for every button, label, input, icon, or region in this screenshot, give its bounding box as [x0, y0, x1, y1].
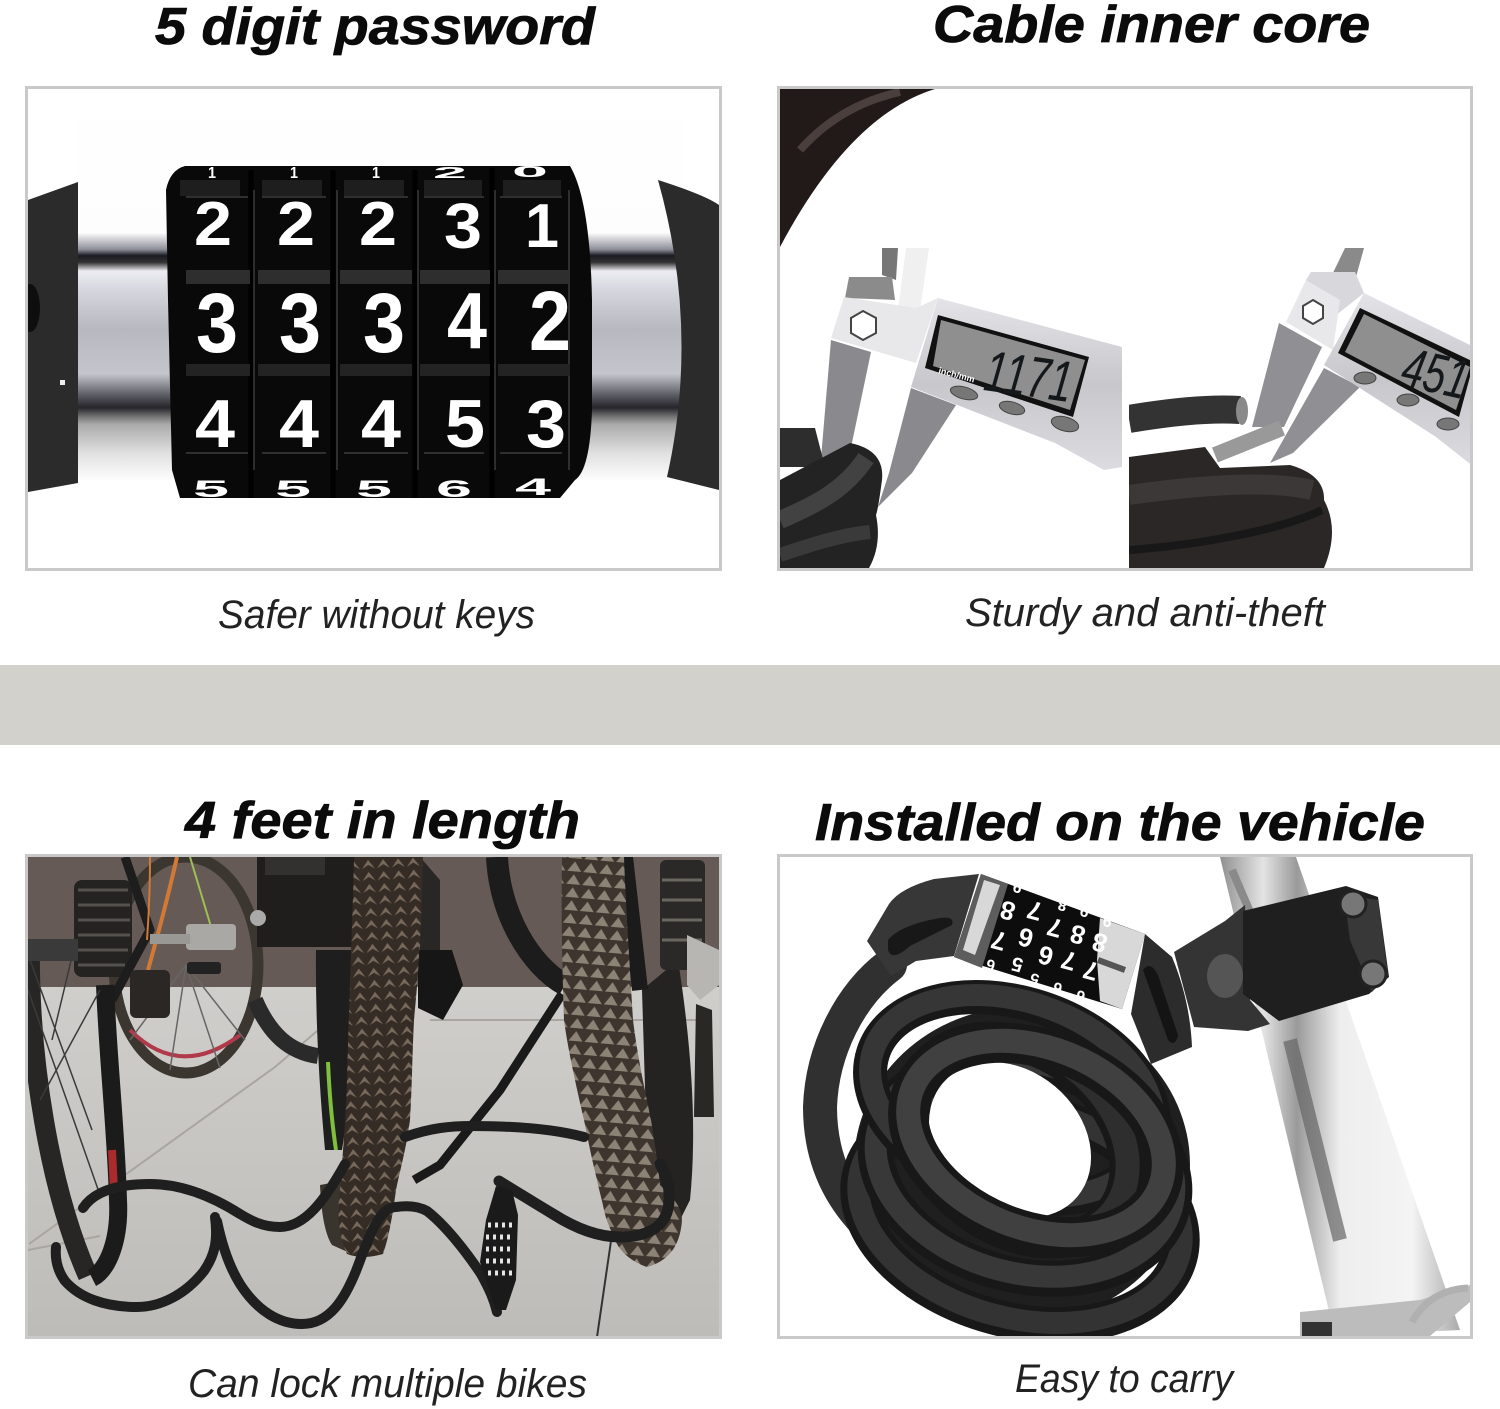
dial stack: 5	[193, 476, 229, 503]
left coil	[780, 428, 882, 568]
lock dials: 7	[1058, 944, 1080, 977]
dial stack: 4	[515, 474, 553, 501]
shackle strand	[820, 965, 890, 1232]
lock dials: 8	[1056, 895, 1069, 914]
lock dials: 7	[1080, 954, 1102, 987]
dial stack: 1	[372, 165, 380, 182]
left black grip	[28, 182, 78, 492]
dial stack: 3	[526, 386, 566, 462]
wall background	[28, 857, 719, 990]
lock dials: 8	[997, 894, 1019, 927]
title: Installed on the vehicle: Installed on the vehicle	[815, 794, 1425, 852]
panel: caliper cable measurements	[778, 88, 1475, 570]
dial stack: 1	[290, 165, 298, 182]
dial stack: 0	[512, 164, 548, 181]
dial stack: 3	[444, 190, 482, 262]
caption: Can lock multiple bikes: Can lock multiple bikes	[188, 1362, 587, 1406]
dial stack: 2	[277, 190, 315, 259]
upper coil	[853, 980, 1163, 1207]
lock dials: 9	[1101, 911, 1114, 930]
coils	[820, 961, 1207, 1359]
lock body right	[1131, 934, 1192, 1064]
caption: Sturdy and anti-theft: Sturdy and anti-theft	[965, 591, 1327, 635]
lock dials: 5	[1028, 969, 1041, 988]
dial stack: 1	[525, 192, 559, 261]
mount bracket	[1174, 886, 1389, 1031]
caption: Safer without keys: Safer without keys	[218, 593, 535, 637]
dark cable arc top left	[780, 89, 935, 247]
dial stack: 2	[359, 190, 397, 259]
lock dials: 8	[1067, 918, 1089, 951]
hole through coil	[929, 1062, 1092, 1216]
lock dials: 8	[1089, 926, 1111, 959]
dial stack: 1	[208, 165, 216, 182]
bike drivetrain and frame	[74, 857, 463, 1150]
dial stack: 3	[279, 276, 321, 370]
lock body left	[867, 874, 979, 976]
dial stack: 4	[361, 386, 401, 462]
lock dials: 9	[1078, 901, 1091, 920]
lock dials: 6	[1015, 921, 1037, 954]
inner coil	[928, 1066, 1144, 1216]
dial stack: 3	[196, 276, 238, 370]
caption: Easy to carry: Easy to carry	[1015, 1357, 1236, 1401]
lock dials: 6	[1074, 986, 1087, 1005]
front coil	[888, 1026, 1184, 1250]
left caliper photo: inch/mm	[937, 365, 976, 385]
rear bike wheels	[114, 857, 565, 1073]
dial stack: 4	[447, 276, 487, 365]
cable	[56, 1126, 669, 1324]
bottom clamp	[1300, 1285, 1470, 1336]
lock dials	[954, 874, 1145, 1009]
panel: bikes locked together photo	[26, 856, 720, 1338]
right caliper photo	[1129, 248, 1475, 568]
coil body fill	[854, 1007, 1190, 1323]
title: 4 feet in length: 4 feet in length	[184, 792, 580, 850]
left caliper photo	[780, 248, 1122, 568]
lock dials: 5	[1009, 952, 1026, 976]
dial stack: 5	[275, 476, 311, 503]
kickstand	[414, 994, 562, 1180]
divider band	[0, 665, 1500, 745]
lock dials: 6	[1035, 939, 1057, 972]
small lock	[480, 1186, 518, 1310]
dial stack: 5	[445, 386, 485, 462]
dial stack: 2	[194, 190, 232, 259]
lock dials: 7	[988, 924, 1010, 957]
floor	[28, 987, 719, 1336]
dial stack: 3	[363, 276, 405, 370]
dial stack: 5	[356, 476, 392, 503]
front wheel left	[28, 940, 118, 1278]
dial stack	[166, 164, 592, 503]
dial stack: 2	[433, 165, 467, 182]
dial stack: 6	[436, 476, 472, 503]
right black grip	[658, 180, 719, 490]
lock dials: 6	[1051, 978, 1064, 997]
panel: combination dials photo	[20, 88, 720, 570]
lock dials: 7	[1024, 894, 1046, 927]
lowest coil	[840, 1098, 1200, 1336]
tyre one	[320, 857, 423, 1257]
right coil with exposed wire	[1129, 397, 1332, 568]
dial stack: 2	[529, 274, 571, 368]
lock dials: 9	[1011, 877, 1024, 896]
silver frame pole	[1220, 857, 1460, 1336]
left caliper photo: 1171	[981, 338, 1077, 415]
third coil	[858, 1062, 1192, 1288]
right rim and drivetrain	[625, 857, 719, 1250]
dial stack: 4	[195, 386, 235, 462]
lock dials: 7	[1044, 911, 1066, 944]
panel: coiled cable lock mounted on frame	[778, 856, 1472, 1359]
dial stack: 4	[279, 386, 319, 462]
lock dials: 6	[984, 955, 997, 974]
right caliper photo: 451	[1396, 335, 1475, 411]
tyre two	[562, 857, 682, 1267]
